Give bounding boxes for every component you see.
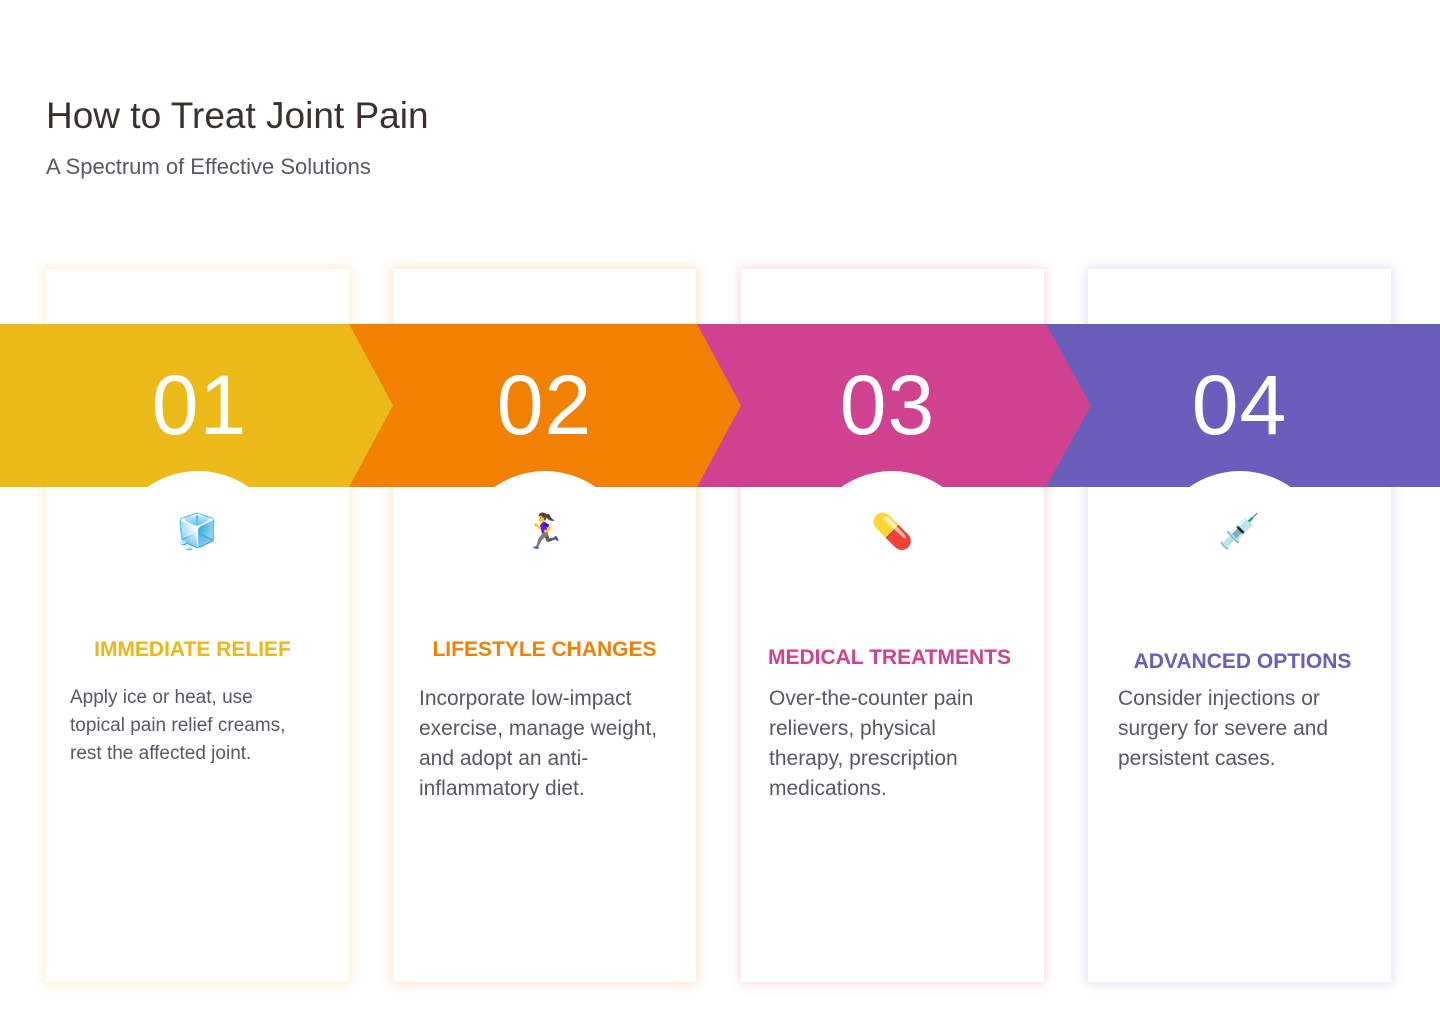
chevron band: [0, 324, 1440, 487]
text 3: Over-the-counter pain relievers, physical therapy, prescription medications.: [769, 687, 973, 800]
icon: pill: 💊: [871, 513, 914, 551]
card 3: [741, 269, 1044, 982]
number 01: 01: [152, 358, 247, 452]
heading 3: MEDICAL TREATMENTS: [768, 646, 1011, 669]
icon: ice: 🧊: [176, 513, 219, 551]
text 4: Consider injections or surgery for severe and persistent cases.: [1118, 687, 1328, 770]
card 4: [1088, 269, 1391, 982]
heading 4: ADVANCED OPTIONS: [1134, 650, 1351, 673]
number 02: 02: [497, 358, 592, 452]
icon: syringe: 💉: [1218, 513, 1261, 551]
icon: runner: 🏃‍♀️: [523, 513, 566, 551]
number 04: 04: [1192, 358, 1287, 452]
heading 2: LIFESTYLE CHANGES: [432, 638, 657, 661]
heading 1: IMMEDIATE RELIEF: [94, 638, 291, 661]
text 2: Incorporate low-impact exercise, manage weight, and adopt an anti-inflammatory diet.: [419, 687, 657, 800]
subtitle: A Spectrum of Effective Solutions: [46, 154, 371, 179]
circles: [110, 471, 286, 647]
card 1: [46, 269, 349, 982]
card 2: [393, 269, 696, 982]
number 03: 03: [840, 358, 935, 452]
title: How to Treat Joint Pain: [46, 95, 429, 136]
text 1: Apply ice or heat, use topical pain relief creams, rest the affected joint.: [70, 687, 285, 764]
